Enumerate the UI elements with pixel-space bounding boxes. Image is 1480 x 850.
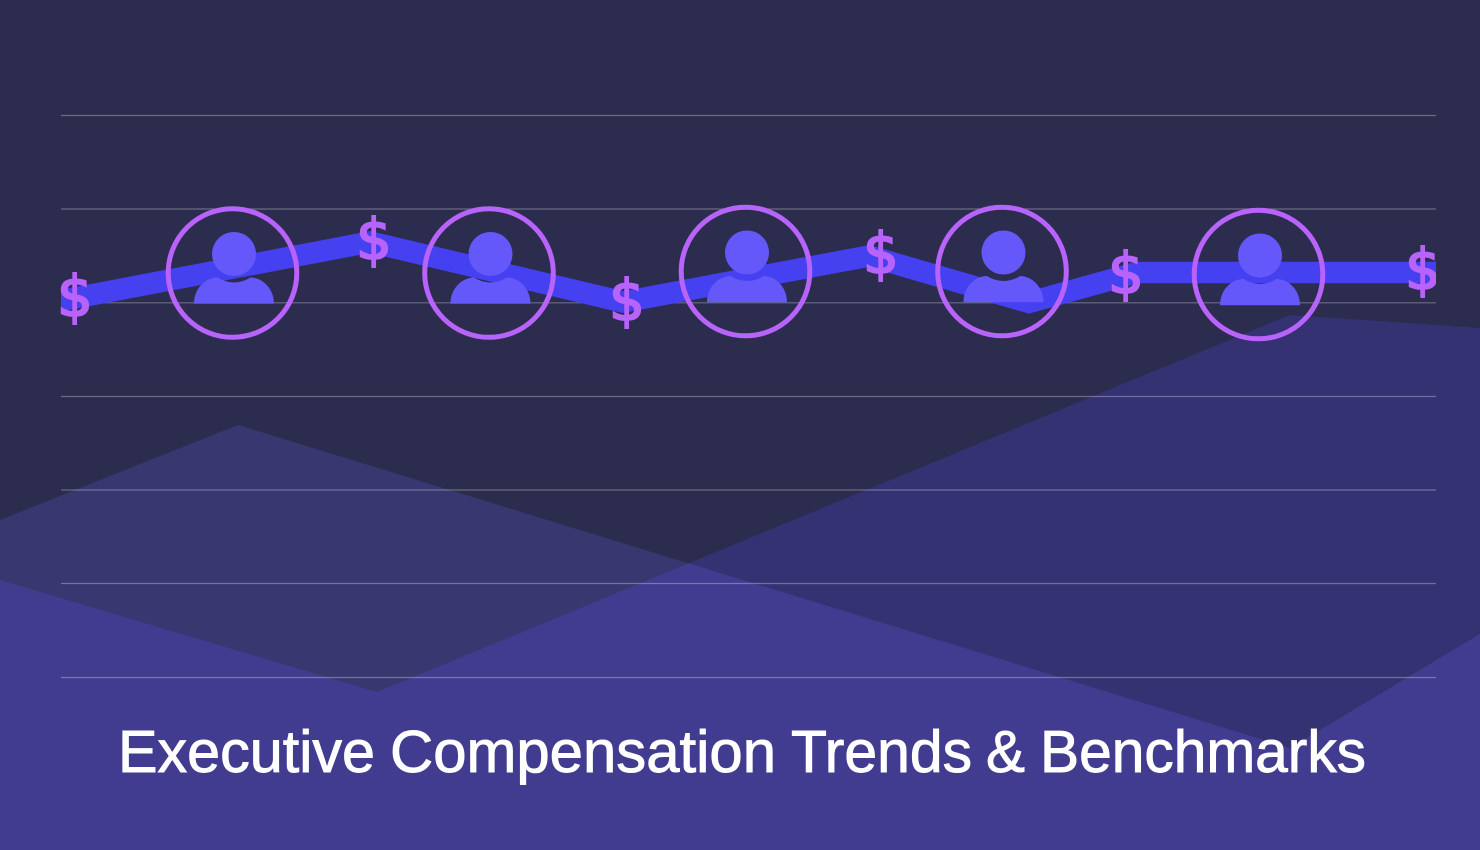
- title: Trends: [791, 719, 972, 785]
- title: Compensation: [390, 719, 776, 785]
- trend line: [40, 242, 1450, 305]
- background area: left mountain: [0, 425, 1480, 850]
- icon: executive 4: [938, 207, 1066, 336]
- icon: executive 5: [1194, 210, 1323, 339]
- dollar markers: [60, 215, 1436, 329]
- icon: executive 1: [168, 209, 297, 337]
- chart grid lines: [61, 116, 1436, 678]
- dollar marker 1: $: [57, 264, 93, 330]
- icon: executive 3: [681, 207, 810, 336]
- background area: right mountain: [0, 315, 1480, 850]
- dollar marker 6: $: [1405, 238, 1441, 302]
- dollar marker 3: $: [609, 268, 645, 334]
- icon: executive 2: [425, 209, 553, 337]
- dollar marker 5: $: [1108, 242, 1144, 306]
- title: &: [986, 719, 1025, 785]
- title: Benchmarks: [1040, 719, 1366, 785]
- dollar marker 4: $: [863, 222, 899, 286]
- title: Executive: [118, 719, 375, 785]
- background area: mountain overlap: [0, 564, 1480, 850]
- dollar marker 2: $: [356, 208, 392, 272]
